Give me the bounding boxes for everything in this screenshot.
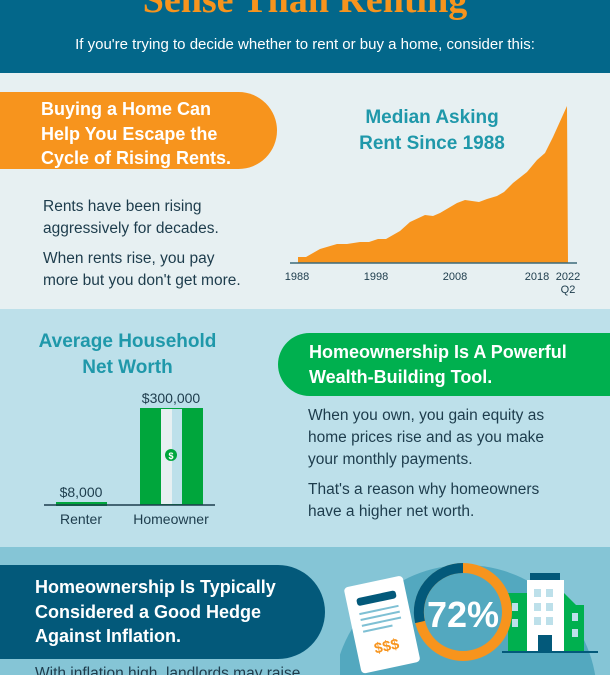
area chart: Q2: [561, 284, 575, 296]
bar chart: $: [168, 451, 174, 461]
area chart: 1988: [285, 271, 309, 283]
text block: When rents rise, you pay: [43, 250, 214, 267]
green heading pill: Homeownership Is A Powerful: [309, 342, 567, 362]
orange heading pill: Buying a Home Can: [41, 99, 211, 119]
text block: That's a reason why homeowners: [308, 481, 539, 498]
text block: Rents have been rising: [43, 198, 202, 215]
header: [0, 0, 610, 73]
bar chart: [44, 390, 215, 527]
panel: net worth: [0, 309, 610, 547]
text block: [308, 481, 539, 520]
panel: inflation: [0, 547, 610, 675]
chart title: Average Household: [39, 331, 216, 352]
orange heading pill: Help You Escape the: [41, 124, 217, 144]
text block: [43, 198, 219, 237]
green heading pill: Wealth-Building Tool.: [309, 366, 492, 386]
dark blue heading pill: Homeownership Is Typically: [35, 577, 276, 597]
panel: rising rents: [0, 73, 610, 309]
text block: aggressively for decades.: [43, 220, 219, 237]
area chart: 2022: [556, 271, 580, 283]
text block: When you own, you gain equity as: [308, 407, 544, 424]
icon: 72% illustration: $$$: [373, 636, 401, 658]
orange heading pill: Cycle of Rising Rents.: [41, 148, 231, 168]
text block: your monthly payments.: [308, 451, 473, 468]
bar chart: Renter: [60, 511, 102, 527]
dark blue heading pill: Against Inflation.: [35, 626, 181, 646]
icon: 72% illustration: [340, 563, 598, 675]
chart title: [359, 107, 505, 154]
dark blue heading pill: [0, 565, 325, 659]
green heading pill: [278, 333, 610, 396]
area chart: [285, 106, 580, 296]
text block: have a higher net worth.: [308, 503, 474, 520]
text block: home prices rise and as you make: [308, 429, 544, 446]
text block: [308, 407, 544, 468]
area chart: 1998: [364, 271, 388, 283]
bar chart: $300,000: [142, 390, 200, 406]
dark blue heading pill: Considered a Good Hedge: [35, 602, 261, 622]
area chart: 2008: [443, 271, 467, 283]
subtitle: If you're trying to decide whether to rent or buy a home, consider this:: [75, 36, 535, 53]
area chart: 2018: [525, 271, 549, 283]
bar chart: Homeowner: [133, 511, 209, 527]
icon: 72% illustration: 72%: [427, 594, 499, 635]
orange heading pill: [0, 92, 277, 169]
chart title: [39, 331, 216, 378]
chart title: Net Worth: [82, 357, 173, 378]
bar chart: $8,000: [60, 484, 103, 500]
text block: [43, 250, 241, 289]
chart title: Median Asking: [365, 107, 499, 128]
chart title: Rent Since 1988: [359, 133, 505, 154]
text block: more but you don't get more.: [43, 272, 241, 289]
